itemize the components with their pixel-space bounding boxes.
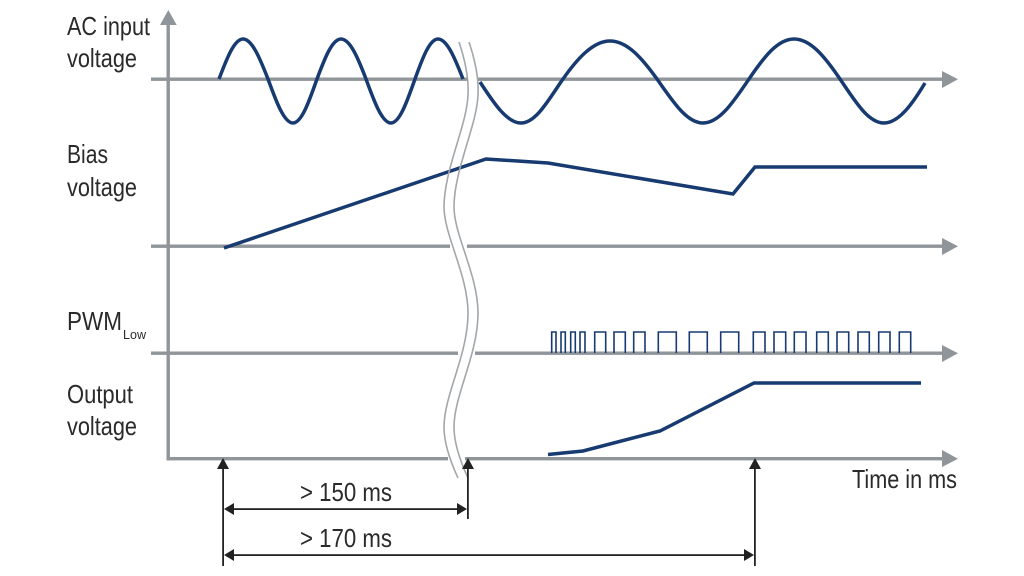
- axis: bias voltage: [151, 238, 958, 255]
- label: output voltage: voltage: [67, 411, 137, 441]
- label: AC input voltage: AC input: [67, 11, 151, 41]
- label: PWM low: PWM: [67, 306, 122, 336]
- label: AC input voltage: voltage: [67, 43, 137, 73]
- dimension: 170 ms: [224, 523, 754, 561]
- label: PWM low: [67, 306, 147, 342]
- marker arrow: 170 ms: [749, 458, 761, 566]
- label: AC input voltage: [67, 11, 151, 73]
- label: bias voltage: Bias: [67, 139, 108, 169]
- label: output voltage: [67, 379, 137, 441]
- marker arrow: start: [217, 458, 229, 566]
- axis: time: [168, 450, 958, 467]
- axis: PWM low: [151, 345, 958, 362]
- axis: AC input voltage: [151, 71, 958, 88]
- bias voltage trace: [224, 159, 927, 248]
- PWM low pulses: [552, 332, 911, 353]
- vertical axis: [160, 10, 177, 460]
- AC input waveform before break: [219, 39, 463, 123]
- AC input waveform after break: [480, 39, 925, 123]
- output voltage trace: [548, 383, 921, 454]
- label: bias voltage: [67, 139, 137, 202]
- dimension: 150 ms: [224, 477, 467, 515]
- label: time axis: Time in ms: [852, 464, 957, 494]
- label: output voltage: Output: [67, 379, 134, 409]
- time axis break: [444, 42, 478, 478]
- label: bias voltage: voltage: [67, 172, 137, 202]
- marker arrow: 150 ms: [462, 458, 474, 519]
- label: 170 ms: > 170 ms: [300, 523, 392, 553]
- label: 150 ms: > 150 ms: [300, 477, 392, 507]
- label: PWM low: Low: [123, 327, 147, 342]
